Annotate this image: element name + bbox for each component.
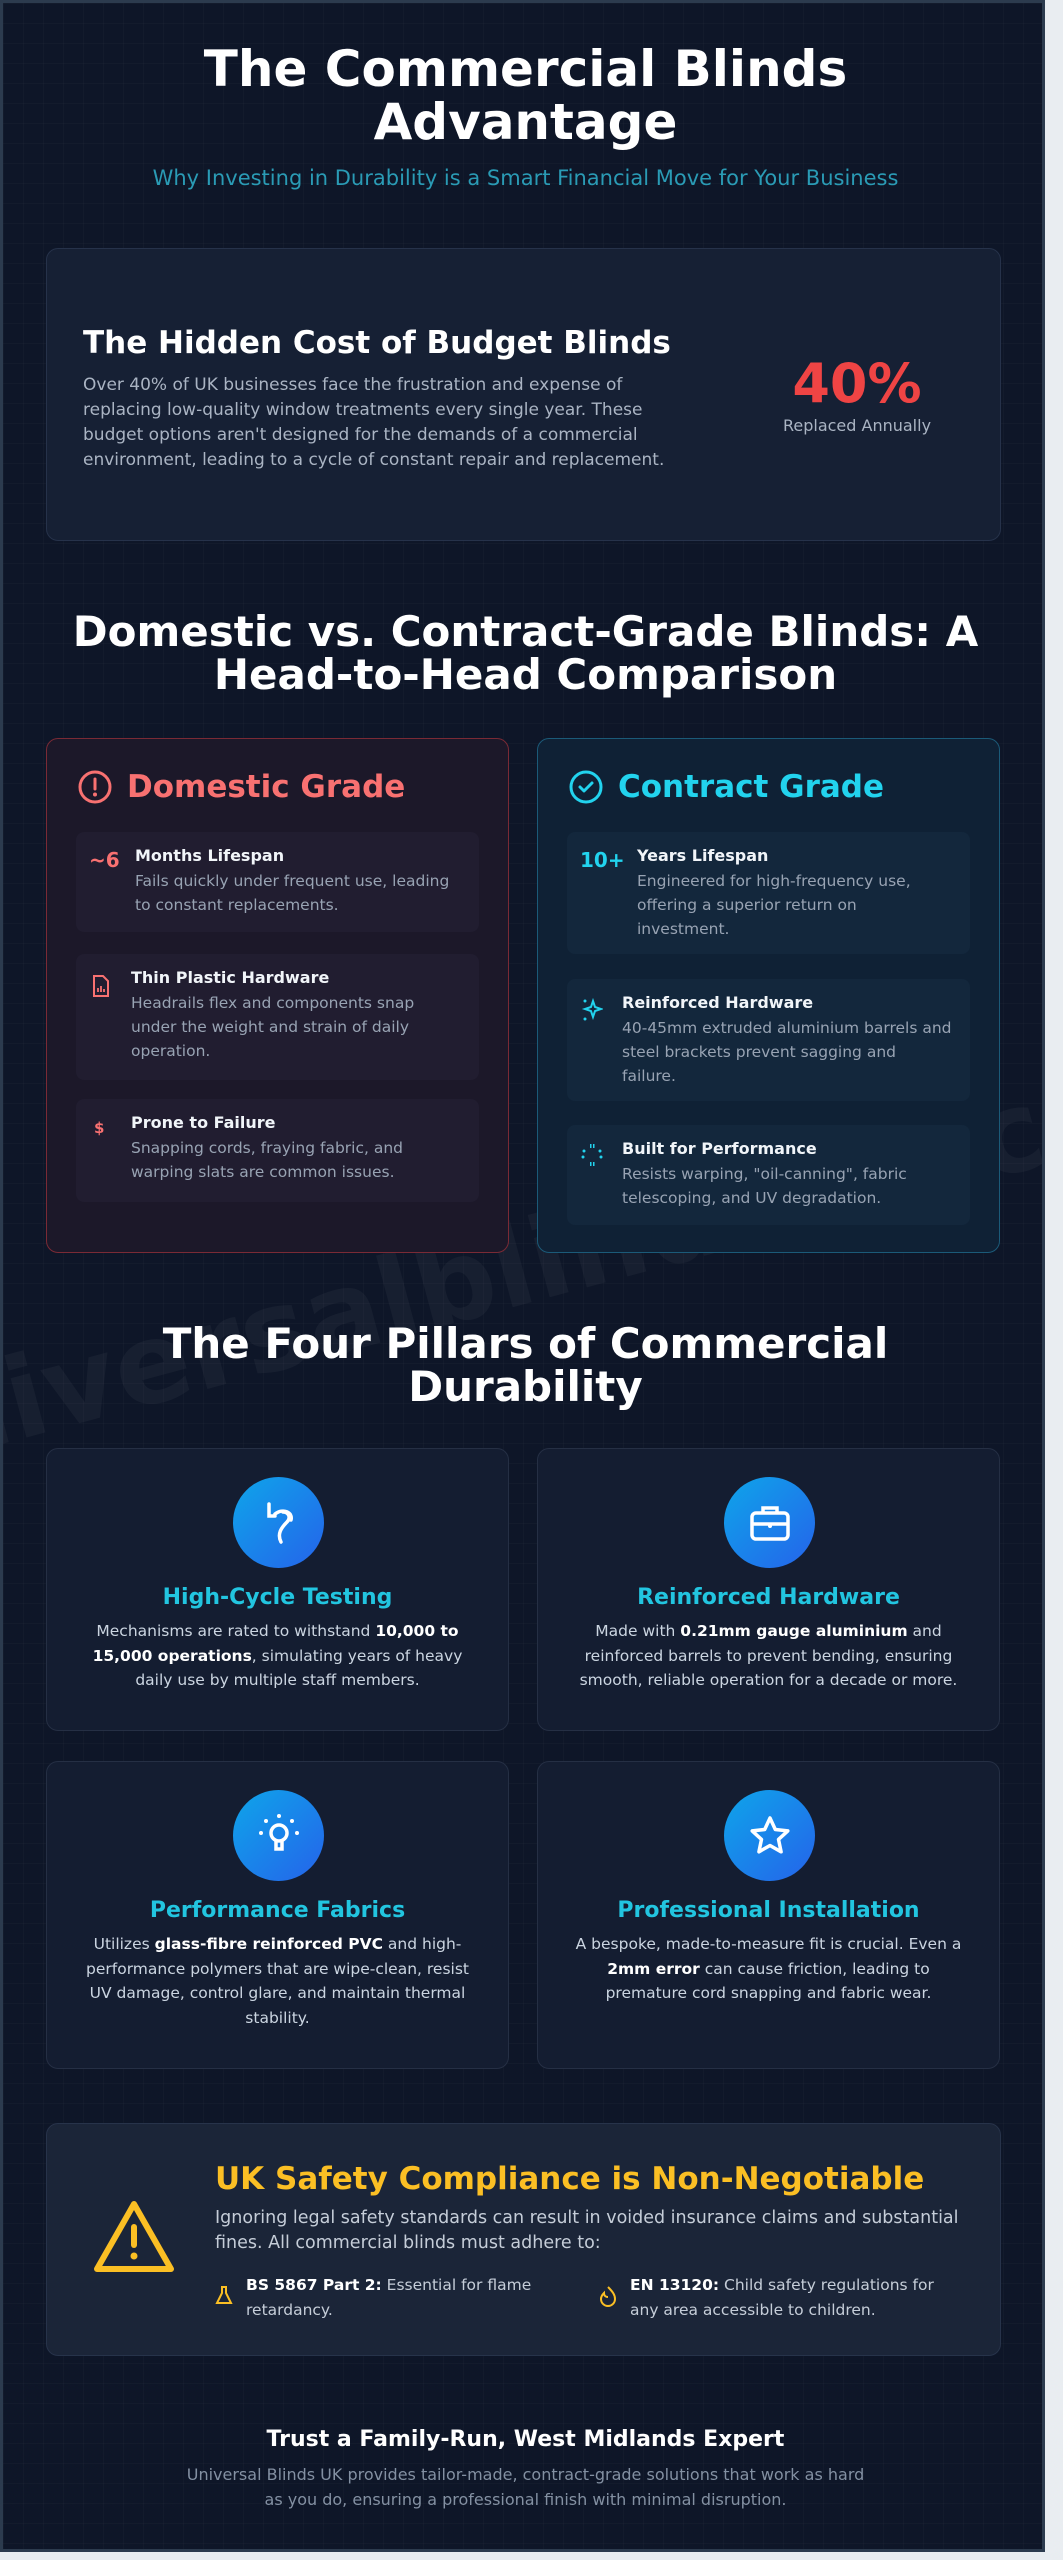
icon: hand (233, 1477, 324, 1568)
title (204, 40, 847, 151)
item: built for performance (567, 1125, 970, 1225)
panel: contract grade (537, 738, 1000, 1253)
item: prone to failure (76, 1099, 479, 1202)
item: thin plastic: Thin Plastic Hardware (131, 968, 329, 987)
card: performance fabrics: Utilizes glass-fibre reinforced PVC and high-performance polymers that are wipe-clean, resist UV damage, control glare, and maintain thermal stability. (86, 1935, 469, 2026)
heading: domestic: Domestic Grade (127, 769, 405, 805)
item: reinforced hardware: Reinforced Hardware (622, 993, 813, 1012)
heading: four pillars: The Four Pillars of Commercial (163, 1319, 888, 1368)
item: months lifespan: Months Lifespan (135, 846, 284, 865)
icon: bulb (233, 1790, 324, 1881)
footer heading: Trust a Family-Run, West Midlands Expert (267, 2427, 784, 2452)
card: performance fabrics (46, 1761, 509, 2069)
item: thin plastic (76, 954, 479, 1080)
item: prone to failure: Snapping cords, fraying fabric, and warping slats are common issues. (131, 1139, 403, 1181)
heading: comparison: Head-to-Head Comparison (214, 650, 837, 699)
heading: contract: Contract Grade (618, 769, 884, 805)
item: years lifespan: 10+ (580, 848, 625, 872)
item: BS 5867: BS 5867 Part 2: Essential for flame retardancy. (246, 2276, 531, 2319)
card: reinforced hardware: Reinforced Hardware (637, 1585, 900, 1610)
footer text: Universal Blinds UK provides tailor-made, contract-grade solutions that work as hard as you do, ensuring a professional finish with minimal disruption. (187, 2465, 864, 2509)
panel: safety compliance (46, 2123, 1001, 2356)
icon: briefcase (724, 1477, 815, 1568)
item: months lifespan: ~6 (89, 848, 120, 872)
item: years lifespan: Engineered for high-frequency use, offering a superior return on investment. (637, 872, 911, 938)
card: professional installation: A bespoke, made-to-measure fit is crucial. Even a 2mm error can cause friction, leading to premature cord snapping and fabric wear. (576, 1935, 961, 2002)
card: professional installation (537, 1761, 1000, 2069)
heading: hidden cost: The Hidden Cost of Budget Blinds (83, 325, 671, 361)
stat: 40% (783, 352, 931, 435)
card: high-cycle testing: High-Cycle Testing (163, 1585, 392, 1610)
text block: hidden cost: Over 40% of UK businesses face the frustration and expense of replacing low-quality window treatments every single year. These budget options aren't designed for the demands of a commercial environment, leading to a cycle of constant repair and replacement. (83, 375, 664, 470)
item: months lifespan (76, 832, 479, 932)
item: built for performance: Built for Performance (622, 1139, 817, 1158)
stat: 40%: Replaced Annually (783, 416, 931, 435)
item: prone to failure: Prone to Failure (131, 1113, 276, 1132)
item: thin plastic: Headrails flex and components snap under the weight and strain of daily operation. (131, 994, 414, 1060)
item: prone to failure: $ (94, 1119, 104, 1137)
heading: four pillars: Durability (408, 1362, 643, 1411)
heading: four pillars (162, 1319, 888, 1411)
item: reinforced hardware: 40-45mm extruded aluminium barrels and (622, 1019, 952, 1037)
item: years lifespan (567, 832, 970, 954)
item: reinforced hardware (567, 979, 970, 1101)
title: Advantage (374, 93, 677, 151)
item: months lifespan: Fails quickly under frequent use, leading to constant replacements. (135, 872, 449, 914)
card: performance fabrics: Performance Fabrics (150, 1898, 405, 1923)
heading: comparison: Domestic vs. Contract-Grade Blinds: A (73, 607, 978, 656)
heading: comparison (73, 607, 978, 699)
icon: star (724, 1790, 815, 1881)
subtitle: Why Investing in Durability is a Smart Financial Move for Your Business (153, 166, 898, 190)
text block: safety: Ignoring legal safety standards can result in voided insurance claims and substantial fines. All commercial blinds must adhere to: (215, 2208, 959, 2253)
panel: domestic grade (46, 738, 509, 1253)
item: EN 13120: EN 13120: Child safety regulations for any area accessible to children. (630, 2276, 934, 2319)
panel: hidden cost (46, 248, 1001, 541)
stat: 40%: 40% (792, 352, 922, 415)
item: years lifespan: Years Lifespan (637, 846, 768, 865)
card: reinforced hardware: Made with 0.21mm gauge aluminium and reinforced barrels to prevent bending, ensuring smooth, reliable operation for a decade or more. (580, 1622, 957, 1689)
item: reinforced hardware: failure. (622, 1067, 676, 1085)
card: reinforced hardware (537, 1448, 1000, 1731)
card: high-cycle testing (46, 1448, 509, 1731)
heading: safety: UK Safety Compliance is Non-Negotiable (215, 2161, 924, 2197)
item: built for performance: Resists warping, "oil-canning", fabric telescoping, and UV degradation. (622, 1165, 907, 1207)
icon: warning (94, 2201, 174, 2272)
item: reinforced hardware: steel brackets prevent sagging and (622, 1043, 896, 1061)
card: high-cycle testing: Mechanisms are rated to withstand 10,000 to 15,000 operations, simulating years of heavy daily use by multiple staff members. (93, 1622, 462, 1689)
card: professional installation: Professional Installation (617, 1898, 920, 1923)
title: The Commercial Blinds (204, 40, 847, 98)
